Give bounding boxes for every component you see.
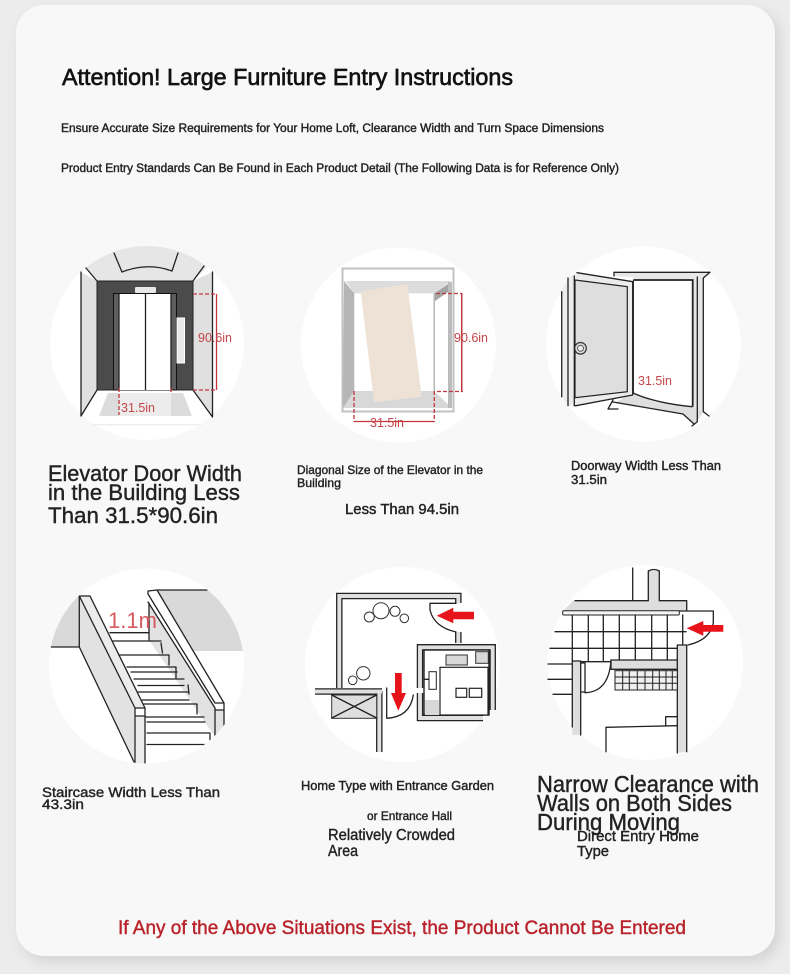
dimension: 90.6in	[436, 293, 488, 392]
caption: entrance garden	[301, 779, 494, 860]
caption: narrow clearance: Direct Entry Home	[577, 829, 699, 845]
icon: elevator front view	[80, 246, 232, 426]
caption: elevator door: Than 31.5*90.6in	[48, 503, 218, 528]
caption: staircase: Staircase Width Less Than	[42, 784, 220, 800]
caption: staircase	[42, 784, 220, 812]
icon: direct entry floor plan	[548, 565, 743, 760]
panel: direct entry home	[537, 565, 759, 860]
panel: elevator door width	[48, 240, 244, 528]
dimension: 31.5in	[119, 388, 171, 415]
title: Attention! Large Furniture Entry Instructions	[62, 64, 513, 90]
caption: entrance garden: Relatively Crowded	[328, 827, 455, 844]
dimension: 90.6in: 90.6in	[454, 331, 488, 345]
arrow: side door	[437, 608, 474, 623]
caption: entrance garden: or Entrance Hall	[367, 809, 452, 823]
caption: narrow clearance: Type	[577, 844, 609, 860]
panel: entrance garden home	[301, 567, 500, 860]
caption: staircase: 43.3in	[42, 796, 84, 812]
dimension: 31.5in: 31.5in	[370, 416, 404, 430]
panel: elevator diagonal size	[297, 248, 496, 518]
icon: entrance garden floor plan	[305, 567, 500, 762]
dimension: 1.1m: 1.1m	[108, 608, 157, 633]
caption: narrow clearance: During Moving	[537, 809, 680, 835]
header	[61, 64, 619, 175]
floor threshold	[614, 394, 703, 424]
dimension: 90.6in: 90.6in	[198, 331, 232, 345]
subtitle line 2: Product Entry Standards Can Be Found in Each Product Detail (The Following Data is for Reference Only)	[61, 163, 619, 175]
caption: doorway: Doorway Width Less Than	[571, 459, 721, 473]
subtitle line 1: Ensure Accurate Size Requirements for Your Home Loft, Clearance Width and Turn Space Dimensions	[61, 123, 604, 135]
caption: entrance garden: Home Type with Entrance Garden	[301, 779, 494, 793]
panel: staircase width	[42, 589, 243, 810]
dimension: 31.5in	[354, 391, 434, 430]
icon: elevator interior with board	[301, 248, 496, 442]
caption: diagonal size: Diagonal Size of the Elevator in the	[297, 463, 483, 477]
caption: diagonal size	[297, 463, 483, 518]
warning footer: If Any of the Above Situations Exist, the Product Cannot Be Entered	[118, 918, 686, 939]
caption: entrance garden: Area	[328, 843, 358, 860]
caption: diagonal size: Less Than 94.5in	[345, 502, 459, 518]
caption: elevator door: in the Building Less	[48, 480, 240, 505]
dimension: 31.5in: 31.5in	[121, 401, 155, 415]
caption: elevator door	[48, 461, 242, 528]
icon: open door	[546, 246, 741, 442]
caption: narrow clearance: Walls on Both Sides	[537, 790, 732, 816]
caption: diagonal size: Building	[297, 476, 341, 490]
dimension: 31.5in: 31.5in	[638, 374, 672, 388]
caption: doorway	[571, 459, 721, 487]
caption: narrow clearance: Narrow Clearance with	[537, 771, 759, 797]
panel: doorway width	[546, 246, 741, 487]
arrow: entry door	[687, 621, 723, 636]
arrow: front door	[391, 673, 406, 711]
caption: elevator door: Elevator Door Width	[48, 461, 242, 486]
caption: narrow clearance	[537, 771, 759, 860]
icon: staircase	[50, 589, 243, 764]
caption: doorway: 31.5in	[571, 473, 607, 487]
dimension: 90.6in	[193, 294, 232, 390]
